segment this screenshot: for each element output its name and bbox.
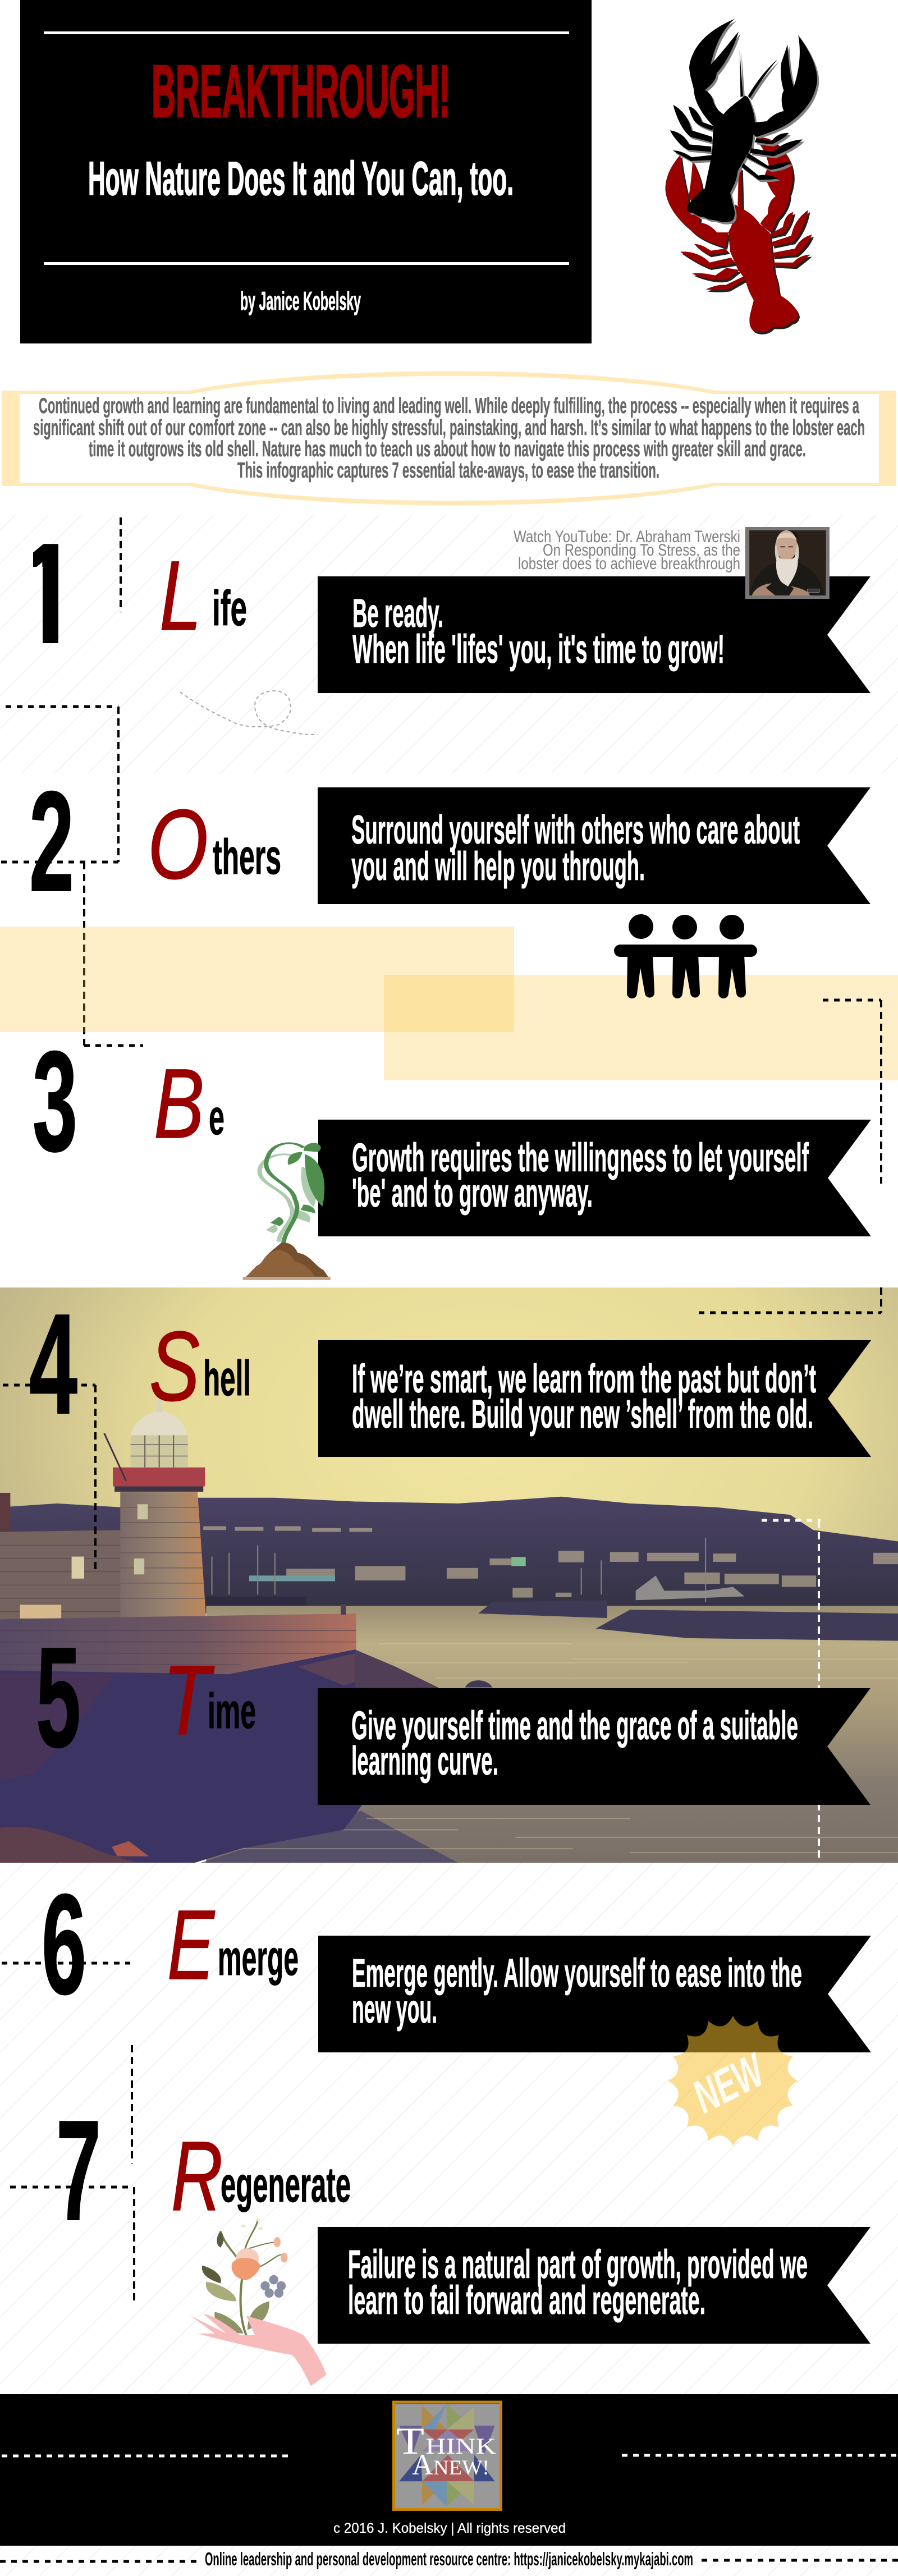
step 1: life <box>17 514 870 693</box>
number 1: 1 <box>17 514 79 673</box>
word egenerate: egenerate <box>221 2157 351 2212</box>
letter S: S <box>149 1312 200 1422</box>
intro text <box>33 394 865 483</box>
word hell: hell <box>203 1350 251 1406</box>
letter R: R <box>171 2121 223 2231</box>
yellow bands <box>0 927 898 1080</box>
banner 1 <box>318 576 870 693</box>
byline: by Janice Kobelsky <box>240 286 361 315</box>
footer panel <box>0 2394 898 2546</box>
logo: think anew <box>392 2401 502 2511</box>
banner 1: Be ready. <box>352 592 443 636</box>
word thers: thers <box>213 829 281 884</box>
banner 4 <box>318 1340 871 1457</box>
word ime: ime <box>208 1683 256 1739</box>
banner 3 <box>318 1120 871 1236</box>
word merge: merge <box>218 1930 299 1986</box>
photo background: lighthouse and harbour <box>0 1287 898 1863</box>
letter O: O <box>148 790 208 900</box>
word ife: ife <box>212 580 247 636</box>
number 4: 4 <box>29 1284 77 1443</box>
video note: On Responding To Stress, as the <box>543 541 740 560</box>
squiggle arrow <box>180 691 318 735</box>
letter L: L <box>159 541 201 651</box>
title panel <box>20 0 592 343</box>
number 3: 3 <box>33 1021 77 1181</box>
badge: new <box>668 2016 798 2146</box>
logo: think anew: NEW! <box>433 2456 489 2479</box>
banner 6 <box>318 1936 871 2052</box>
number 2: 2 <box>29 762 74 921</box>
icon: seedling <box>243 1143 331 1280</box>
step 3: be <box>33 1021 871 1236</box>
intro panel <box>2 372 896 505</box>
logo: think anew: HINK <box>425 2433 496 2459</box>
number 6: 6 <box>42 1864 86 2024</box>
letter B: B <box>154 1049 204 1159</box>
number 7: 7 <box>56 2091 101 2250</box>
step 4: shell <box>29 1284 871 1457</box>
word e: e <box>209 1089 224 1145</box>
step 7: regenerate <box>56 2091 870 2344</box>
title panel: BREAKTHROUGH! <box>152 50 450 132</box>
step 6: emerge <box>42 1864 871 2052</box>
video note: lobster does to achieve breakthrough <box>518 554 740 573</box>
number 5: 5 <box>36 1617 81 1777</box>
step 5: time <box>36 1617 870 1805</box>
letter T: T <box>163 1645 214 1755</box>
photo: Dr. Twerski <box>745 527 830 599</box>
banner 2 <box>318 787 870 904</box>
video note <box>514 528 740 573</box>
banner 7 <box>318 2227 870 2344</box>
icon: three people <box>614 914 757 998</box>
banner 3: 'be' and to grow anyway. <box>352 1171 593 1216</box>
badge: new: NEW <box>684 2042 775 2123</box>
banner 6: new you. <box>352 1987 437 2032</box>
copyright: c 2016 J. Kobelsky | All rights reserved <box>333 2520 566 2536</box>
step 2: others <box>29 762 870 921</box>
banner 5 <box>318 1688 870 1805</box>
logo: think anew: A <box>412 2449 433 2481</box>
video note: Watch YouTube: Dr. Abraham Twerski <box>514 528 740 546</box>
icon: two lobsters <box>665 19 819 334</box>
letter E: E <box>167 1890 216 2000</box>
icon: hand holding flower <box>190 2219 327 2386</box>
banner 5: learning curve. <box>351 1739 498 1784</box>
logo: think anew: T <box>396 2419 424 2462</box>
